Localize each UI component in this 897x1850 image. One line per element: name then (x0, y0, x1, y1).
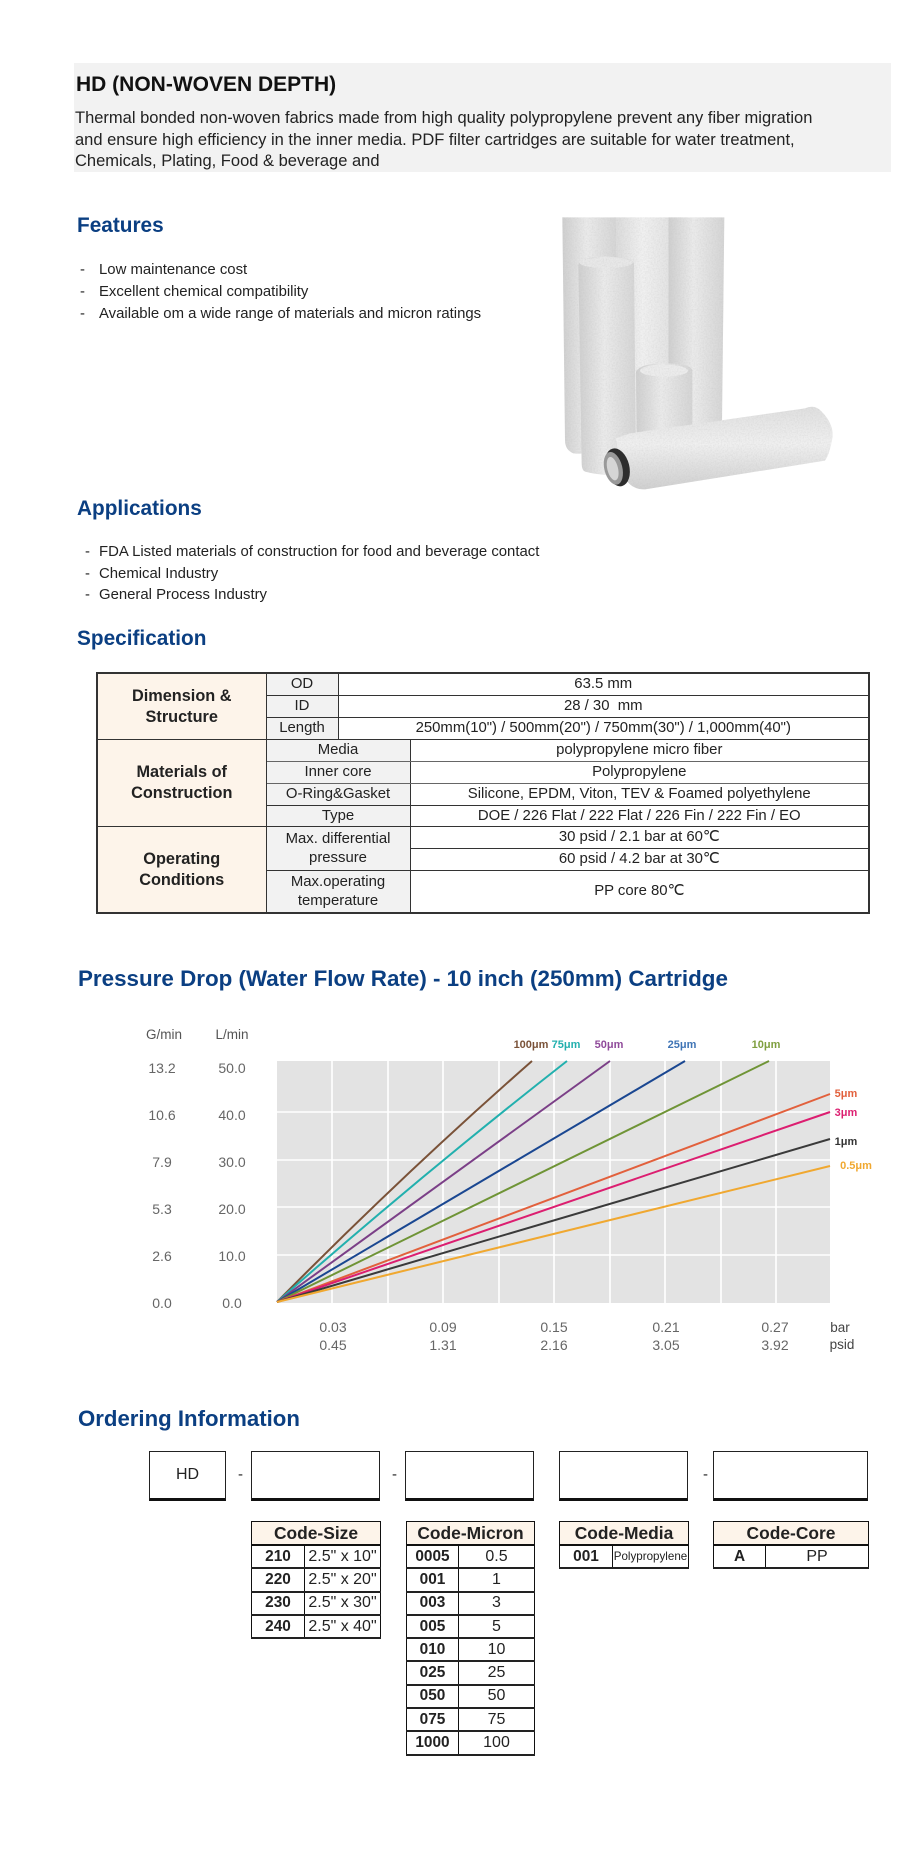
features list: Low maintenance cost (99, 262, 247, 278)
table: code size: 2.5" x 40" (308, 1618, 377, 1635)
table: code micron: 50 (488, 1687, 505, 1704)
y axis values: 50.0 (218, 1060, 246, 1076)
applications list: - (85, 566, 90, 582)
y axis values: 5.3 (152, 1201, 172, 1217)
intro text (75, 109, 812, 170)
applications list: Chemical Industry (99, 566, 218, 582)
table: code size: 210 (265, 1548, 291, 1565)
heading: specification: Specification (77, 627, 206, 650)
y axis values: 7.9 (152, 1154, 172, 1170)
specification table: Structure (146, 708, 218, 726)
line labels: 3μm (835, 1107, 858, 1119)
specification table: 250mm(10") / 500mm(20") / 750mm(30") / 1,000mm(40") (416, 720, 791, 736)
specification table: ID (295, 698, 309, 714)
specification table (96, 672, 870, 914)
table: code micron: 100 (483, 1734, 510, 1751)
x axis values (319, 1319, 854, 1353)
table: code core: PP (806, 1548, 828, 1565)
specification table: polypropylene micro fiber (556, 742, 722, 758)
intro text: Thermal bonded non-woven fabrics made from high quality polypropylene prevent any fiber migration (75, 109, 812, 127)
applications list: FDA Listed materials of construction for food and beverage contact (99, 544, 539, 560)
applications list (85, 544, 540, 603)
features list (80, 262, 481, 322)
y axis values: 20.0 (218, 1201, 246, 1217)
x axis values: bar (830, 1320, 850, 1335)
axis titles (146, 1027, 249, 1042)
x axis values: 1.31 (429, 1337, 457, 1353)
specification table: Max.operating (291, 874, 385, 890)
table: code micron: 010 (420, 1641, 445, 1658)
table: code micron: 005 (420, 1618, 445, 1635)
x axis values: 3.05 (652, 1337, 680, 1353)
line labels: 25μm (668, 1039, 697, 1051)
order code boxes: HD (176, 1466, 199, 1483)
specification table: Media (318, 742, 358, 758)
x axis values: 0.15 (540, 1319, 568, 1335)
order code boxes (149, 1451, 868, 1501)
specification table: Dimension & (132, 687, 232, 705)
applications list: - (85, 544, 90, 560)
specification table: 60 psid / 4.2 bar at 30℃ (559, 851, 720, 867)
features list: - (80, 306, 85, 322)
table: code media: Polypropylene (614, 1550, 687, 1563)
heading: features: Features (77, 214, 164, 237)
specification table: temperature (298, 893, 378, 909)
table: code size: 230 (265, 1594, 291, 1611)
table: code micron: 75 (488, 1711, 505, 1728)
table: code micron: 5 (492, 1618, 501, 1635)
chart: pressure drop (146, 1027, 872, 1353)
table: code micron: 0.5 (485, 1548, 508, 1565)
table: code size: 2.5" x 10" (308, 1548, 377, 1565)
line labels: 100μm (514, 1039, 549, 1051)
table: code micron: 1000 (415, 1734, 450, 1751)
y axis values: 40.0 (218, 1107, 246, 1123)
x axis values: 0.45 (319, 1337, 347, 1353)
specification table: Inner core (304, 764, 372, 780)
y axis values (148, 1060, 246, 1311)
specification table: Length (279, 720, 325, 736)
table: code micron: 3 (492, 1594, 501, 1611)
line labels: 10μm (752, 1039, 781, 1051)
line labels: 75μm (552, 1039, 581, 1051)
table: code size: Code-Size (274, 1523, 358, 1543)
order code boxes: - (703, 1466, 708, 1483)
table: code micron: 050 (420, 1687, 445, 1704)
table: code media: Code-Media (575, 1523, 673, 1543)
applications list: - (85, 587, 90, 603)
specification table: 30 psid / 2.1 bar at 60℃ (559, 829, 720, 845)
image: filter cartridges (562, 217, 832, 490)
table: code micron (406, 1521, 535, 1756)
y axis values: 10.0 (218, 1248, 246, 1264)
line labels: 0.5μm (840, 1160, 872, 1172)
x axis values: psid (830, 1337, 854, 1352)
title: HD (NON-WOVEN DEPTH) (76, 73, 336, 96)
order code boxes: - (392, 1466, 397, 1483)
table: code micron: 001 (420, 1571, 445, 1588)
specification table: Materials of (136, 763, 227, 781)
intro text: and ensure high efficiency in the inner media. PDF filter cartridges are suitable for water treatment, (75, 130, 795, 148)
axis titles: L/min (215, 1027, 249, 1042)
order code boxes: - (238, 1466, 243, 1483)
table: code size (251, 1521, 381, 1639)
specification table: DOE / 226 Flat / 222 Flat / 226 Fin / 222 Fin / EO (478, 808, 801, 824)
specification table: pressure (309, 850, 367, 866)
line labels: 5μm (835, 1088, 858, 1100)
table: code micron: 075 (420, 1711, 445, 1728)
y axis values: 0.0 (222, 1295, 242, 1311)
table: code micron: 10 (488, 1641, 505, 1658)
table: code micron: 25 (488, 1664, 505, 1681)
line labels: 50μm (595, 1039, 624, 1051)
x axis values: 0.27 (761, 1319, 789, 1335)
y axis values: 10.6 (148, 1107, 176, 1123)
features list: Available om a wide range of materials and micron ratings (99, 306, 481, 322)
table: code core (713, 1521, 869, 1569)
table: code core: Code-Core (747, 1523, 835, 1543)
specification table: Max. differential (286, 830, 390, 846)
specification table: OD (291, 676, 313, 692)
x axis values: 0.09 (429, 1319, 457, 1335)
features list: - (80, 262, 85, 278)
y axis values: 30.0 (218, 1154, 246, 1170)
x axis values: 3.92 (761, 1337, 789, 1353)
specification table: Type (322, 808, 354, 824)
heading: applications: Applications (77, 497, 202, 520)
table: code micron: 025 (420, 1664, 445, 1681)
table: code media: 001 (573, 1548, 599, 1565)
intro text: Chemicals, Plating, Food & beverage and (75, 152, 380, 170)
heading: ordering information: Ordering Information (78, 1406, 300, 1431)
applications list: General Process Industry (99, 587, 267, 603)
panel: intro (74, 63, 891, 172)
specification table: Operating (143, 850, 220, 868)
x axis values: 0.03 (319, 1319, 347, 1335)
y axis values: 0.0 (152, 1295, 172, 1311)
table: code size: 220 (265, 1571, 291, 1588)
table: code media (559, 1521, 689, 1569)
line labels (514, 1039, 872, 1172)
heading: pressure drop: Pressure Drop (Water Flow Rate) - 10 inch (250mm) Cartridge (78, 966, 728, 991)
specification table: Silicone, EPDM, Viton, TEV & Foamed polyethylene (468, 786, 811, 802)
table: code micron: 003 (420, 1594, 445, 1611)
y axis values: 2.6 (152, 1248, 172, 1264)
specification table: PP core 80℃ (594, 883, 684, 899)
line labels: 1μm (835, 1136, 858, 1148)
table: code micron: 1 (492, 1571, 501, 1588)
table: code size: 2.5" x 30" (308, 1594, 377, 1611)
table: code micron: Code-Micron (417, 1523, 524, 1543)
x axis values: 2.16 (540, 1337, 568, 1353)
specification table: Conditions (139, 871, 224, 889)
features list: - (80, 284, 85, 300)
table: code micron: 0005 (415, 1548, 450, 1565)
specification table: 28 / 30 mm (564, 698, 643, 714)
y axis values: 13.2 (148, 1060, 176, 1076)
table: code size: 240 (265, 1618, 291, 1635)
features list: Excellent chemical compatibility (99, 284, 308, 300)
specification table: 63.5 mm (574, 676, 632, 692)
table: code core: A (734, 1548, 745, 1565)
specification table: Polypropylene (592, 764, 686, 780)
chart lines (277, 1061, 830, 1302)
specification table: Construction (131, 784, 232, 802)
x axis values: 0.21 (652, 1319, 680, 1335)
specification table: O-Ring&Gasket (286, 786, 390, 802)
axis titles: G/min (146, 1027, 182, 1042)
table: code size: 2.5" x 20" (308, 1571, 377, 1588)
